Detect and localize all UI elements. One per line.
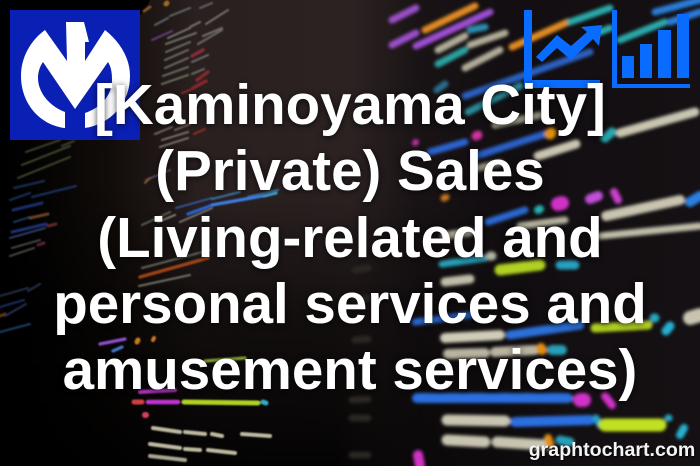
title: (Living-related and: [97, 206, 603, 269]
title shadow: [Kaminoyama City]: [94, 74, 606, 137]
title shadow: personal services and: [53, 273, 647, 336]
icon: line chart with arrow: [524, 10, 602, 88]
title shadow: (Living-related and: [97, 207, 603, 270]
title: [53, 73, 647, 401]
code lines: large right column: [352, 0, 700, 466]
title shadow: [53, 74, 647, 402]
code lines: small top column: [139, 3, 278, 286]
title: (Private) Sales: [155, 139, 545, 202]
title: amusement services): [63, 338, 637, 401]
title shadow: (Private) Sales: [155, 140, 545, 203]
title: personal services and: [53, 272, 647, 335]
code lines: far-left blue column: [0, 140, 76, 332]
code lines: centre column: [100, 193, 276, 460]
icon: bar chart: [612, 10, 690, 88]
title: [Kaminoyama City]: [94, 73, 606, 136]
emblem: white ring and arrow M: [21, 22, 130, 128]
watermark: site name: graphtochart.com: [529, 439, 695, 461]
watermark: site name: graphtochart.com: [530, 440, 696, 462]
emblem: blue inner cut-out: [38, 62, 112, 130]
logo: blue square with white emblem: [10, 10, 140, 140]
title shadow: amusement services): [63, 339, 637, 402]
